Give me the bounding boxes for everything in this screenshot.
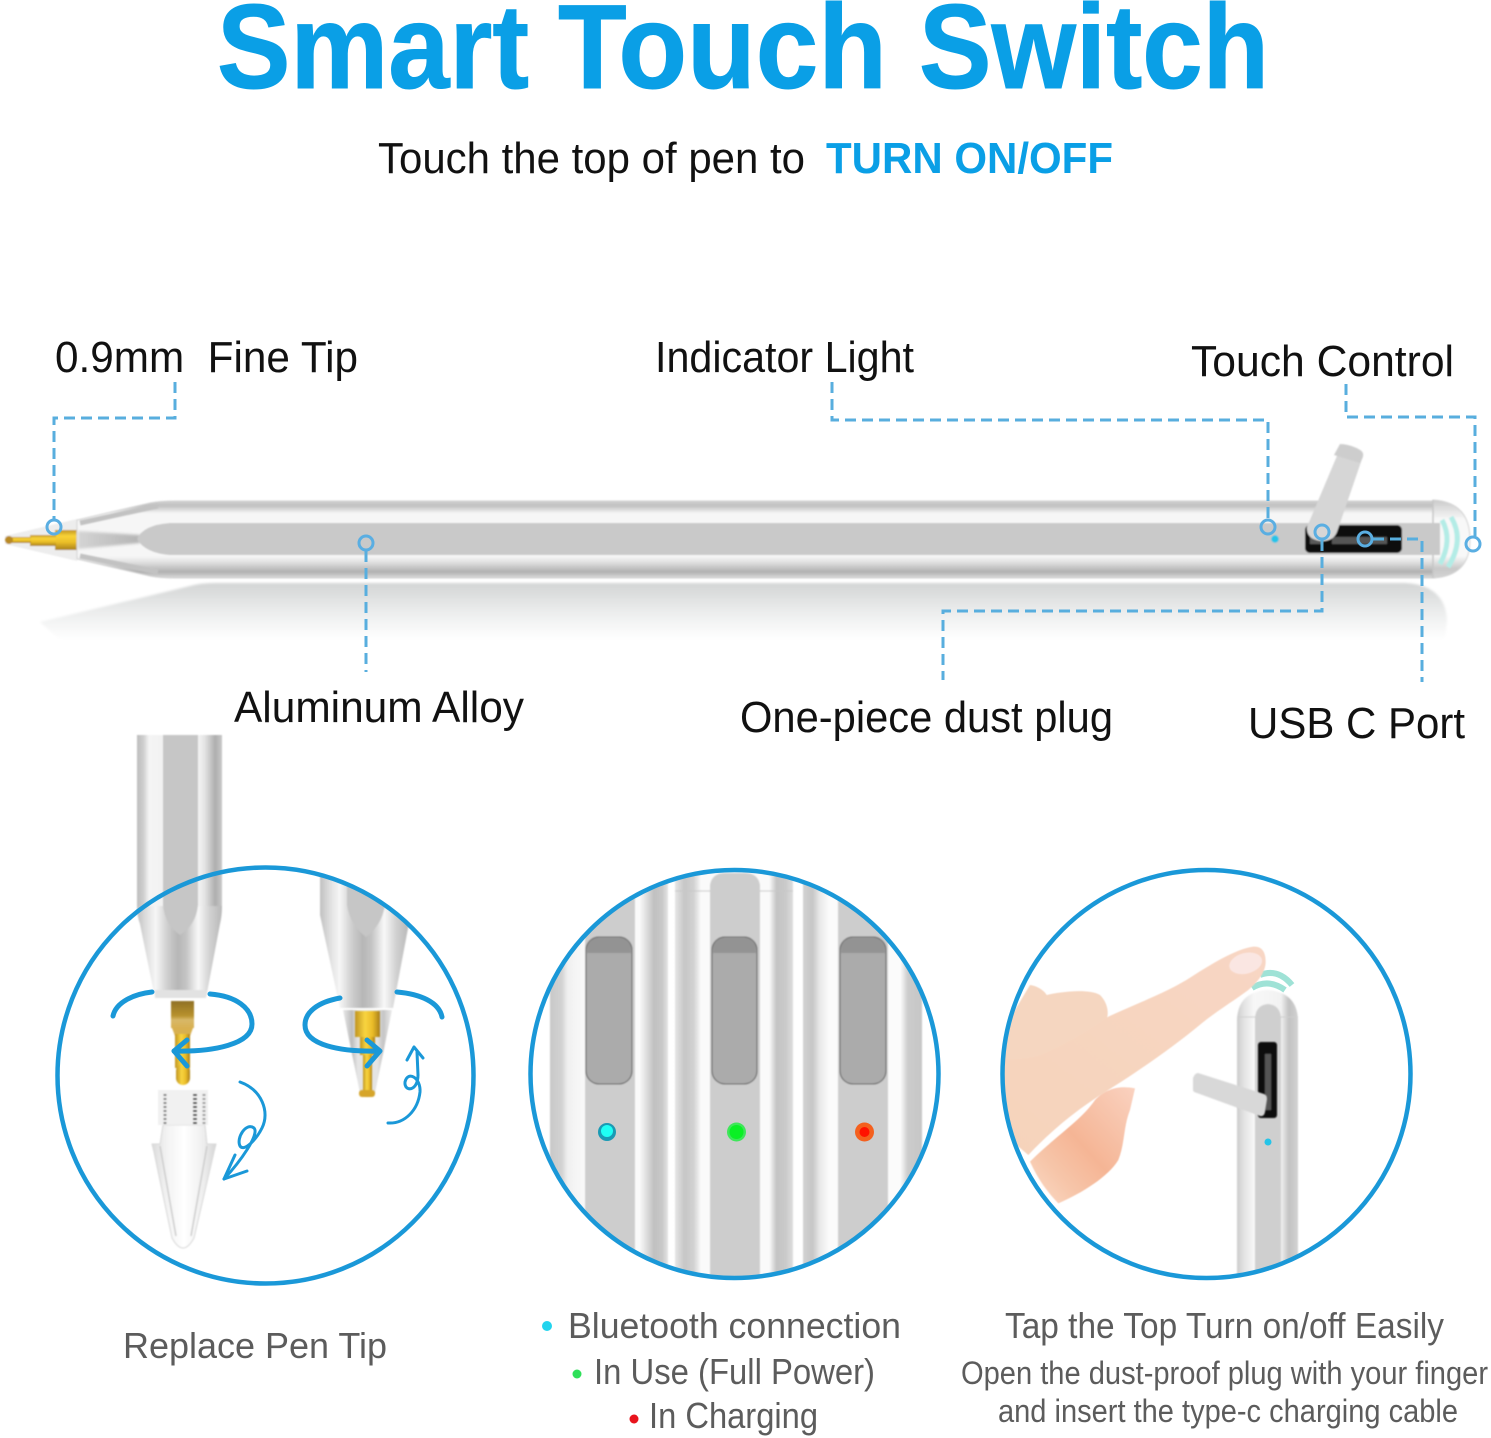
back fingers <box>1005 984 1108 1060</box>
unscrew arrow <box>224 1082 265 1179</box>
caption: tap the top <box>961 1305 1488 1429</box>
clear replacement cap <box>152 1090 216 1248</box>
pen barrel and taper <box>77 501 1435 578</box>
subtitle: TURN ON/OFF <box>826 134 1113 183</box>
taper edge shading <box>80 506 158 572</box>
cyan led <box>598 1123 616 1141</box>
circle outline <box>530 870 938 1278</box>
leader: indicator light <box>832 382 1275 534</box>
dust plug <box>1193 1073 1267 1116</box>
caption: tap the top: Tap the Top Turn on/off Easily <box>1005 1305 1444 1346</box>
fingernail <box>1229 952 1262 974</box>
red led <box>855 1122 874 1142</box>
rotation arrow: left <box>113 992 252 1066</box>
label: fine tip: 0.9mm Fine Tip <box>55 333 358 382</box>
legend: indicator states <box>542 1305 901 1436</box>
gold tip <box>5 530 77 550</box>
stylus pen <box>5 444 1470 578</box>
leader: touch control <box>1346 384 1480 551</box>
right clear cone <box>343 1010 392 1096</box>
leader: usb c port <box>1358 532 1422 682</box>
charging state: In Charging <box>649 1395 818 1436</box>
label: usb c port: USB C Port <box>1248 699 1465 748</box>
left pen barrel <box>137 735 222 998</box>
touch waves <box>1440 517 1457 567</box>
green led <box>727 1122 746 1142</box>
taper centre streak <box>78 531 140 549</box>
touch waves <box>1252 973 1292 990</box>
subtitle: Touch the top of pen to <box>378 134 805 183</box>
leader: aluminum alloy <box>359 536 373 672</box>
indicator dot <box>1264 1138 1272 1146</box>
pen reflection <box>40 583 1447 640</box>
pen flat panel <box>137 523 1440 555</box>
caption: tap the top: and insert the type-c charging cable <box>998 1393 1458 1429</box>
subtitle <box>378 134 1113 183</box>
bluetooth state: Bluetooth connection <box>568 1305 901 1346</box>
left gold stem <box>171 1001 194 1085</box>
usb port <box>1258 1042 1277 1118</box>
panel: indicator colours <box>530 860 938 1290</box>
label: dust plug: One-piece dust plug <box>740 693 1113 742</box>
screw-on arrow <box>388 1047 423 1123</box>
rotation arrow: right <box>305 992 442 1066</box>
label: aluminum alloy: Aluminum Alloy <box>234 683 524 732</box>
leader: dust plug <box>943 525 1329 680</box>
right gold tip <box>355 1011 380 1097</box>
right pen <box>802 884 923 1264</box>
left pen <box>550 884 668 1264</box>
pen end cap <box>1433 500 1470 578</box>
label: touch control: Touch Control <box>1191 337 1454 386</box>
panel: tap the top <box>995 870 1410 1290</box>
title <box>217 0 1269 114</box>
indicator dot <box>1271 535 1279 543</box>
in use state: In Use (Full Power) <box>594 1351 875 1392</box>
pen tip clear cone <box>5 519 77 561</box>
circle outline <box>1002 870 1410 1278</box>
thumb <box>1030 1087 1135 1203</box>
caption: replace pen tip: Replace Pen Tip <box>123 1325 387 1366</box>
hand <box>995 947 1266 1203</box>
middle pen <box>675 860 793 1290</box>
dust plug <box>1307 444 1363 541</box>
right pen <box>320 860 409 1008</box>
circle outline <box>58 868 474 1284</box>
index finger and palm <box>995 947 1266 1155</box>
usb port <box>1305 525 1402 553</box>
pen upright <box>1237 990 1298 1290</box>
leader: fine tip <box>47 382 175 534</box>
label: indicator light: Indicator Light <box>655 333 914 382</box>
panel: replace pen tip <box>58 735 474 1284</box>
